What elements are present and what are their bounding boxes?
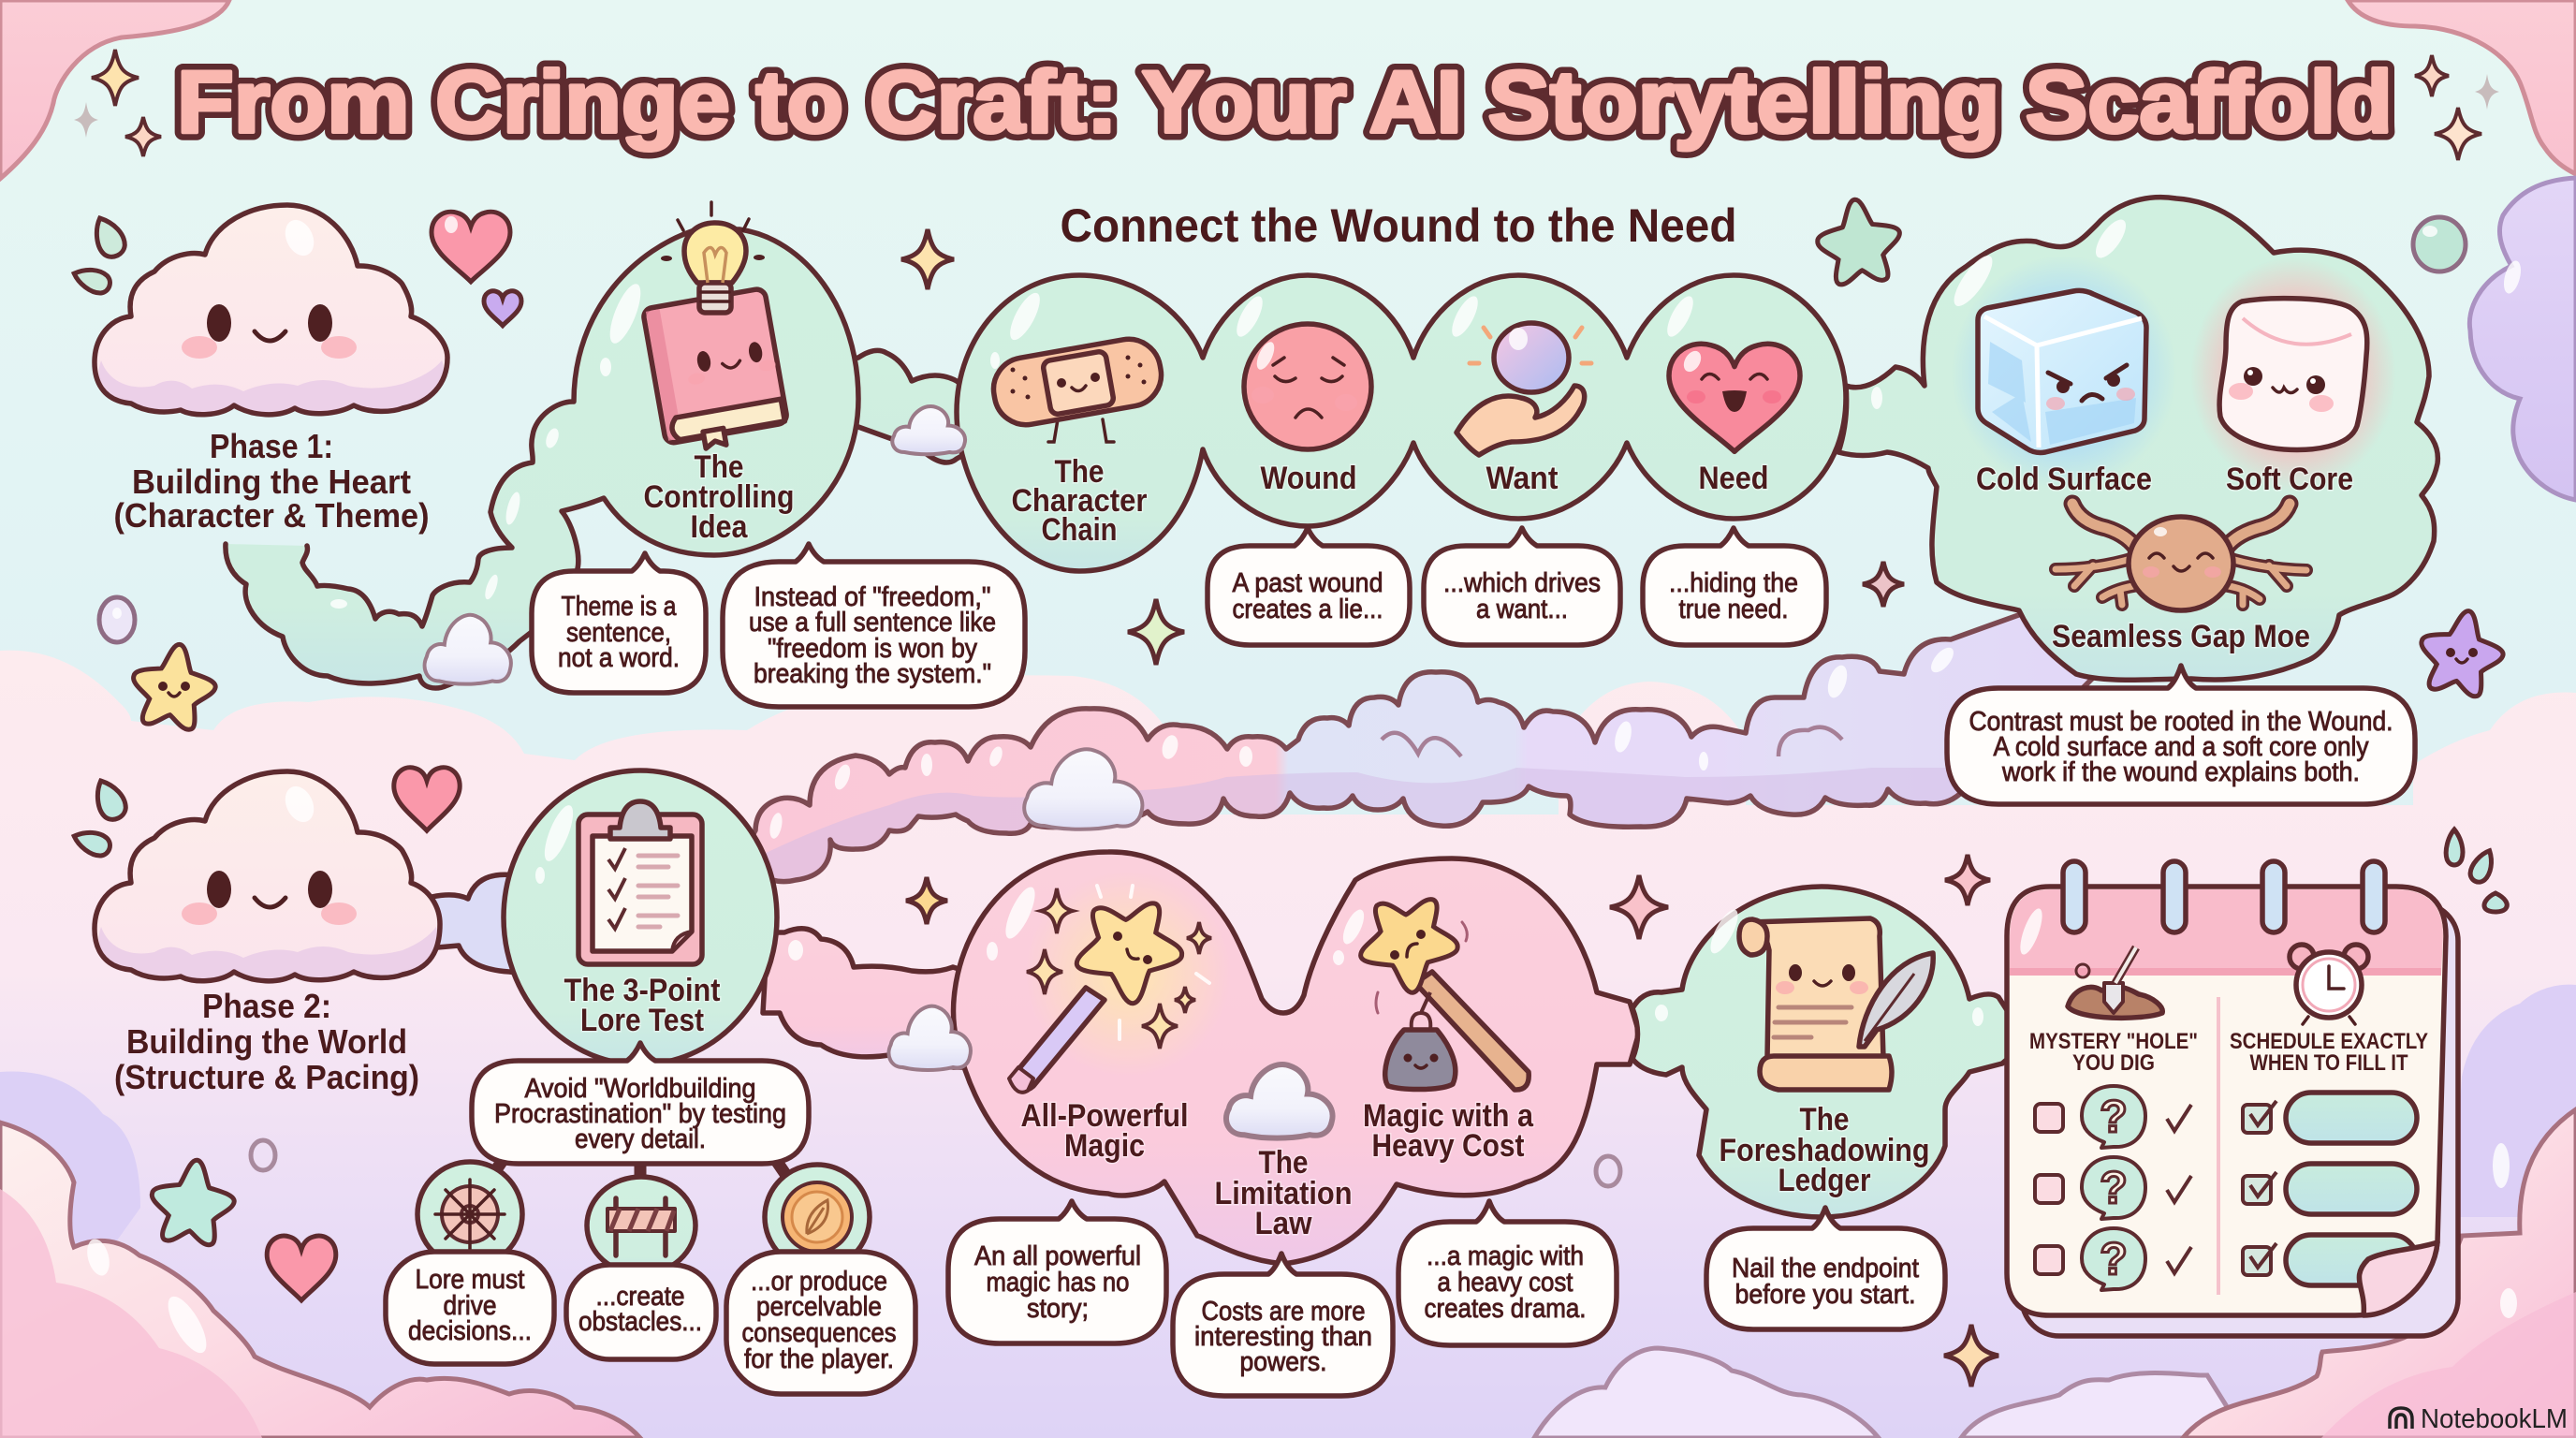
corner decoration: bottom-right clouds xyxy=(2183,985,2576,1438)
callout: drives a want: a want... xyxy=(1476,594,1568,624)
connector: mint tube Idea to Chain xyxy=(842,350,973,462)
left column: question rows: ? xyxy=(2100,1235,2128,1284)
left column: question rows: ? xyxy=(2100,1093,2128,1142)
callout: avoid worldbuilding procrastination: Procrastination" by testing xyxy=(494,1099,786,1129)
callout: Instead of freedom: breaking the system." xyxy=(754,659,991,689)
right column: scheduled rows xyxy=(2243,1093,2417,1285)
callout: create obstacles xyxy=(566,1265,716,1359)
icon: clipboard xyxy=(578,801,702,964)
callout: Theme is a sentence: not a word. xyxy=(558,643,680,673)
callout: hiding the true need: true need. xyxy=(1679,594,1788,624)
peeling page corner xyxy=(2359,1242,2437,1315)
left column: question rows xyxy=(2035,1086,2191,1290)
callout: all powerful magic has no story: An all powerful xyxy=(974,1241,1141,1271)
label: Magic with a Heavy Cost: Magic with a xyxy=(1363,1098,1534,1134)
icon: wand all-powerful xyxy=(1009,871,1231,1093)
label: The Controlling Idea: Idea xyxy=(691,509,748,545)
small cloud on band xyxy=(1024,749,1142,829)
callout: lore must drive decisions xyxy=(386,1252,554,1364)
panel: The Controlling Idea bubble and mint path xyxy=(226,229,858,688)
corner decoration: bottom-centre cloud xyxy=(1534,1348,2247,1438)
callout: Instead of freedom: Instead of "freedom," xyxy=(754,582,990,612)
icon: wound sad face xyxy=(1244,324,1371,449)
left column: question rows: ? xyxy=(2100,1164,2128,1213)
icon: marshmallow xyxy=(2219,299,2367,449)
label: The Foreshadowing Ledger xyxy=(1719,1102,1930,1198)
callout: produce perceivable consequences: consequences xyxy=(741,1318,897,1348)
callout: Theme is a sentence: Theme is a xyxy=(562,592,677,622)
panel: foreshadowing ledger bubble xyxy=(1632,887,2009,1217)
icon: cloud mascot phase 1 xyxy=(95,205,447,415)
sparkles around title xyxy=(74,50,2499,160)
panel: Seamless Gap Moe cloud xyxy=(1838,198,2437,680)
callout: contrast rooted in the wound: A cold surface and a soft core only xyxy=(1994,732,2369,762)
callout: all powerful magic has no story xyxy=(948,1201,1166,1343)
label: Magic with a Heavy Cost: Heavy Cost xyxy=(1372,1128,1524,1164)
label: The Controlling Idea xyxy=(644,449,794,545)
icon: limitation law cloud xyxy=(1226,1064,1333,1138)
connector: lavender cloud from Phase 2 to Lore Test xyxy=(412,874,524,974)
column headers: WHEN TO FILL IT xyxy=(2250,1050,2408,1076)
icon: barricade xyxy=(587,1177,695,1274)
label: Phase 2: (Structure & Pacing) xyxy=(114,1058,419,1096)
callout: Instead of freedom: "freedom is won by xyxy=(768,634,977,664)
icon: hand holding orb xyxy=(1456,323,1591,455)
connector: pink tube to Magic xyxy=(763,929,973,1067)
label: The Controlling Idea: Controlling xyxy=(644,479,794,515)
callout: Instead of freedom xyxy=(723,544,1025,707)
label: The 3-Point Lore Test: The 3-Point xyxy=(564,973,721,1008)
label: The Character Chain: The xyxy=(1054,454,1105,490)
label: Phase 2 xyxy=(114,987,419,1096)
callout: nail the endpoint: before you start. xyxy=(1735,1280,1915,1310)
binder rings xyxy=(2063,861,2385,932)
callout: produce perceivable consequences: for the player. xyxy=(744,1344,894,1374)
label: The Controlling Idea: The xyxy=(695,449,743,485)
label: Phase 2: Building the World xyxy=(126,1022,407,1061)
callout: lore must drive decisions: Lore must xyxy=(416,1265,524,1295)
icon: axolotl xyxy=(2056,504,2306,610)
label: The Limitation Law: Law xyxy=(1254,1206,1312,1241)
callout: create obstacles: obstacles... xyxy=(578,1307,702,1337)
label: Soft Core: Soft Core xyxy=(2226,462,2353,497)
label: The 3-Point Lore Test xyxy=(564,973,721,1038)
callout: hiding the true need xyxy=(1643,528,1826,645)
label: The Foreshadowing Ledger: Ledger xyxy=(1778,1163,1870,1198)
heading: Connect the Wound to the Need: Connect the Wound to the Need xyxy=(1060,199,1737,252)
callout: drives a want: ...which drives xyxy=(1443,568,1601,598)
label: The Foreshadowing Ledger: The xyxy=(1799,1102,1850,1137)
callout: costs are more interesting xyxy=(1173,1254,1393,1396)
callout: heavy cost creates drama xyxy=(1398,1201,1617,1345)
label: Phase 1: (Character & Theme) xyxy=(114,496,429,535)
small cloud on connector xyxy=(892,406,965,454)
icon: book with lightbulb xyxy=(642,202,790,455)
icon: ship wheel xyxy=(417,1162,522,1267)
callout: lore must drive decisions: drive xyxy=(444,1291,496,1321)
corner decoration: top-left pink cloud xyxy=(0,0,229,179)
icon: ice cube xyxy=(1978,290,2146,453)
callout: all powerful magic has no story: magic has no xyxy=(987,1268,1129,1298)
small cloud on connector xyxy=(889,1006,971,1070)
callout: Theme is a sentence: sentence, xyxy=(566,618,671,648)
callout: produce perceivable consequences: ...or produce xyxy=(751,1267,887,1297)
column headers: MYSTERY "HOLE" xyxy=(2029,1029,2198,1054)
callout: hiding the true need: ...hiding the xyxy=(1669,568,1798,598)
callout: past wound: A past wound xyxy=(1232,568,1383,598)
label: The Limitation Law xyxy=(1215,1145,1352,1241)
icon: heart xyxy=(1669,344,1800,451)
label: Phase 1 xyxy=(114,427,429,535)
callout: nail the endpoint xyxy=(1706,1208,1945,1329)
callout: produce perceivable consequences xyxy=(726,1252,915,1394)
callout: heavy cost creates drama: creates drama. xyxy=(1425,1294,1586,1324)
callout: drives a want xyxy=(1424,528,1620,645)
logo: NotebookLM: NotebookLM xyxy=(2421,1404,2568,1434)
icon: faces on stars xyxy=(112,216,2478,697)
decorations: hearts, drops, orbs, sparkles, stars (row 2) xyxy=(70,768,2507,1387)
callout: past wound: creates a lie... xyxy=(1232,594,1383,624)
connectors: callout to three icons xyxy=(483,1156,796,1189)
callout: Theme is a sentence xyxy=(532,553,706,693)
callout: create obstacles: ...create xyxy=(595,1282,685,1312)
icon: coin with leaf xyxy=(765,1165,870,1269)
callout: nail the endpoint: Nail the endpoint xyxy=(1732,1254,1919,1284)
label: The Limitation Law: Limitation xyxy=(1215,1176,1352,1211)
callout: heavy cost creates drama: ...a magic with xyxy=(1427,1241,1584,1271)
label: Need: Need xyxy=(1698,461,1769,496)
callout: contrast rooted in the wound: work if the wound explains both. xyxy=(2001,757,2360,787)
label: Phase 1: Building the Heart xyxy=(132,462,411,501)
label: All-Powerful Magic xyxy=(1020,1098,1189,1164)
callout: costs are more interesting: Costs are more xyxy=(1202,1297,1365,1327)
label: The Character Chain xyxy=(1011,454,1148,548)
column headers xyxy=(2029,1029,2428,1076)
callout: avoid worldbuilding procrastination: every detail. xyxy=(575,1124,706,1154)
corner decoration: top-right pink cloud xyxy=(2348,0,2576,174)
icon: shovel in dirt xyxy=(2068,947,2162,1018)
column headers: YOU DIG xyxy=(2072,1050,2155,1076)
corner decoration: right lavender cloud xyxy=(2469,178,2576,500)
small cloud on path xyxy=(425,615,511,684)
callout: heavy cost creates drama: a heavy cost xyxy=(1438,1268,1573,1298)
callout: Instead of freedom: use a full sentence like xyxy=(749,608,996,638)
panel: 3-Point Lore Test bubble xyxy=(504,770,777,1064)
callout: past wound xyxy=(1208,528,1410,645)
label: Phase 2: Phase 2: xyxy=(202,987,331,1025)
label: The Foreshadowing Ledger: Foreshadowing xyxy=(1719,1133,1930,1168)
transition band: pink to lavender cloud path xyxy=(749,609,2097,899)
callout: produce perceivable consequences: percelvable xyxy=(756,1292,882,1322)
icon: bandage character xyxy=(988,334,1166,442)
title: From Cringe to Craft: Your AI Storytelling Scaffold xyxy=(177,52,2393,151)
icon: cloud mascot phase 2 xyxy=(95,771,440,981)
panel: calendar ledger xyxy=(2007,861,2458,1336)
icon: wand with heavy weight xyxy=(1356,897,1529,1090)
corner decoration: bottom-left cloud xyxy=(0,1072,640,1438)
column headers: SCHEDULE EXACTLY xyxy=(2230,1029,2428,1054)
callout: contrast rooted in the wound xyxy=(1947,666,2415,804)
label: Phase 1: Phase 1: xyxy=(210,427,333,465)
panel: Limitation Law magic bubble xyxy=(889,852,1639,1264)
label: Cold Surface: Cold Surface xyxy=(1976,462,2152,497)
callout: avoid worldbuilding procrastination xyxy=(472,1043,809,1164)
panel: character chain xyxy=(892,275,1846,571)
label: Want: Want xyxy=(1486,461,1558,496)
label: The 3-Point Lore Test: Lore Test xyxy=(580,1003,704,1038)
label: All-Powerful Magic: All-Powerful xyxy=(1020,1098,1189,1134)
icon: scroll with quill xyxy=(1739,918,1933,1090)
label: Seamless Gap Moe: Seamless Gap Moe xyxy=(2052,619,2310,654)
callout: lore must drive decisions: decisions... xyxy=(408,1316,532,1346)
label: The Character Chain: Character xyxy=(1011,483,1148,519)
title: From Cringe to Craft: Your AI Storytelling Scaffold xyxy=(177,52,2393,151)
callout: contrast rooted in the wound: Contrast must be rooted in the Wound. xyxy=(1969,707,2393,737)
label: Magic with a Heavy Cost xyxy=(1363,1098,1534,1164)
label: The Limitation Law: The xyxy=(1258,1145,1309,1181)
callout: costs are more interesting: interesting than xyxy=(1194,1322,1372,1352)
decorations: hearts, drops, orbs, sparkles, stars (row 1) xyxy=(70,196,2510,732)
label: All-Powerful Magic: Magic xyxy=(1064,1128,1145,1164)
label: Wound: Wound xyxy=(1260,461,1357,496)
callout: all powerful magic has no story: story; xyxy=(1027,1294,1089,1324)
label: The Character Chain: Chain xyxy=(1041,512,1118,548)
callout: costs are more interesting: powers. xyxy=(1239,1347,1327,1377)
callout: avoid worldbuilding procrastination: Avoid "Worldbuilding xyxy=(524,1074,756,1104)
icon: alarm clock xyxy=(2290,945,2368,1024)
